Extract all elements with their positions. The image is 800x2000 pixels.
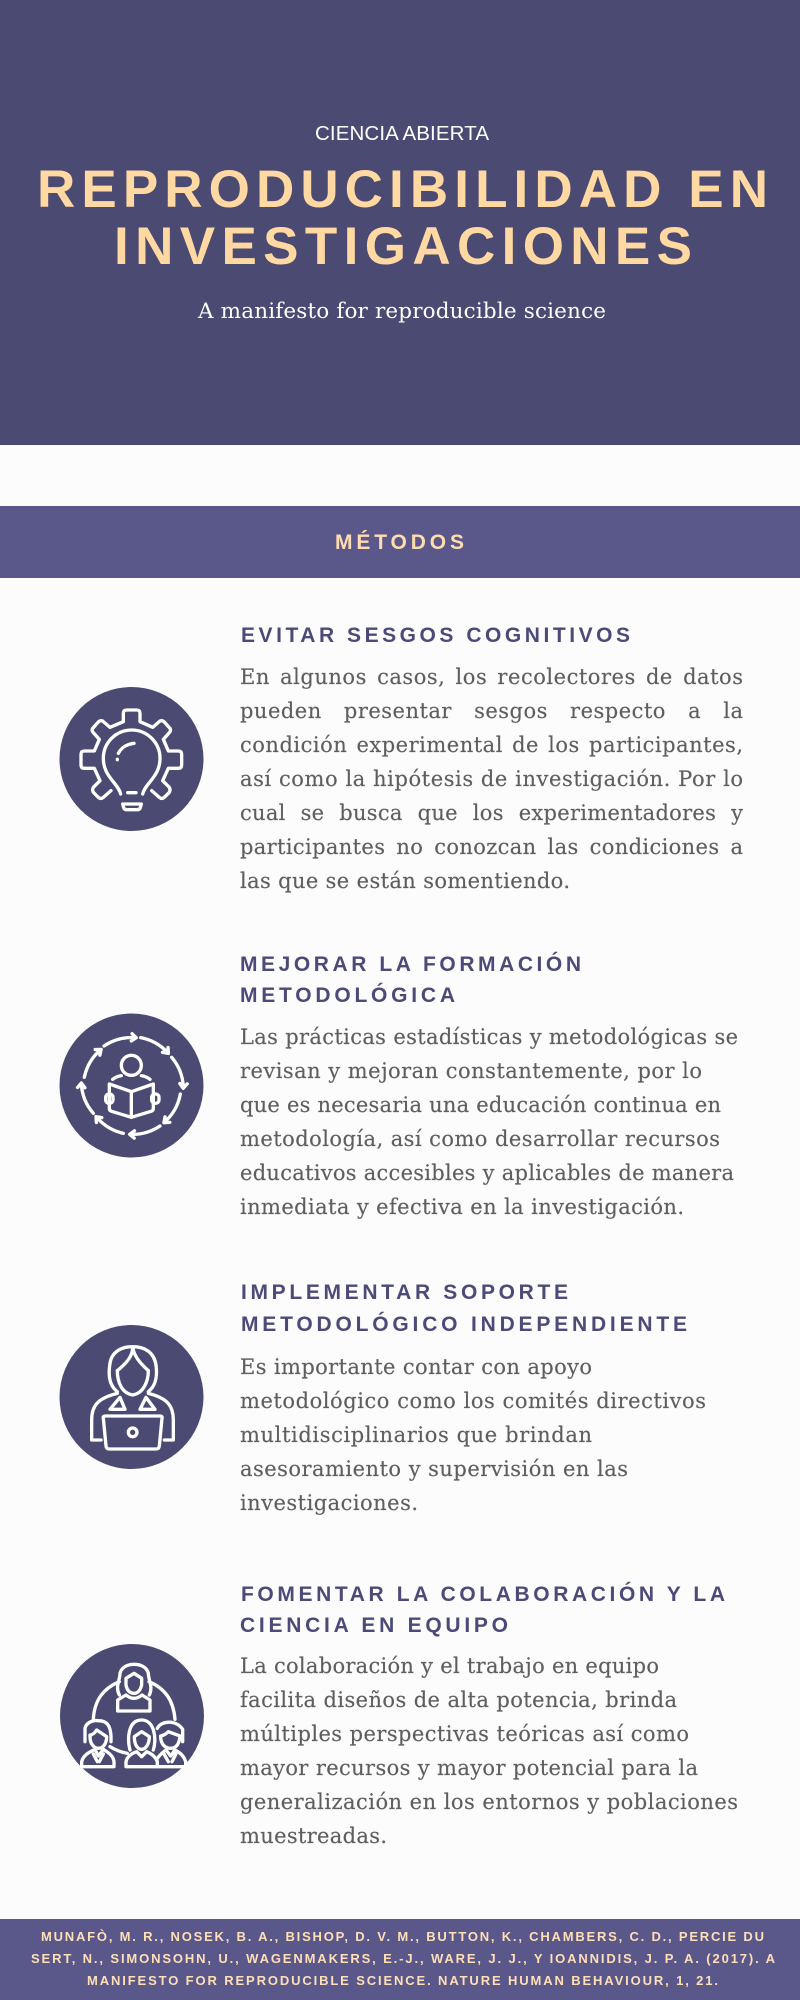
icon: reader in arrow cycle	[60, 1014, 204, 1158]
heading	[240, 1582, 725, 1637]
body text: investigaciones.	[240, 1491, 418, 1515]
icon: gear with light bulb	[60, 687, 204, 831]
body text: multidisciplinarios que brindan	[240, 1423, 592, 1447]
section band: métodos: MÉTODOS	[335, 531, 464, 554]
panel: mejorar la formación metodológica	[60, 952, 738, 1219]
body text: las que se están somentiendo.	[240, 869, 570, 893]
title: INVESTIGACIONES	[114, 217, 692, 276]
heading	[240, 952, 581, 1007]
body text	[240, 1654, 738, 1848]
body text: revisan y mejoran constantemente, por lo	[240, 1059, 702, 1083]
panel: evitar sesgos cognitivos	[60, 624, 743, 893]
body text: generalización en los entornos y poblaciones	[240, 1790, 738, 1814]
body text: Es importante contar con apoyo	[240, 1355, 592, 1379]
body text	[240, 665, 743, 893]
icon: team of four	[60, 1644, 204, 1788]
heading: METODOLÓGICA	[240, 983, 455, 1007]
section band: métodos	[0, 506, 800, 578]
body text: inmediata y efectiva en la investigación.	[240, 1195, 684, 1219]
footer citation: SERT, N., SIMONSOHN, U., WAGENMAKERS, E.-J., WARE, J. J., Y IOANNIDIS, J. P. A. (2017). A	[31, 1951, 776, 1966]
body text: asesoramiento y supervisión en las	[240, 1457, 628, 1481]
heading: EVITAR SESGOS COGNITIVOS	[241, 624, 630, 647]
title	[37, 160, 768, 276]
footer citation: MUNAFÒ, M. R., NOSEK, B. A., BISHOP, D. V. M., BUTTON, K., CHAMBERS, C. D., PERCIE DU	[41, 1929, 764, 1944]
heading: CIENCIA EN EQUIPO	[240, 1614, 508, 1637]
icon: woman with laptop	[60, 1325, 204, 1469]
body text	[240, 1025, 738, 1219]
heading	[241, 1281, 687, 1336]
subtitle: A manifesto for reproducible science	[197, 299, 606, 324]
body text: que es necesaria una educación continua en	[240, 1093, 721, 1117]
body text: cual se busca que los experimentadores y	[240, 801, 743, 825]
heading: MEJORAR LA FORMACIÓN	[240, 952, 581, 976]
panel: fomentar la colaboración	[60, 1582, 738, 1848]
body text: así como la hipótesis de investigación. Por lo	[240, 767, 743, 791]
body text: facilita diseños de alta potencia, brinda	[240, 1688, 677, 1712]
heading: METODOLÓGICO INDEPENDIENTE	[241, 1312, 687, 1336]
heading: FOMENTAR LA COLABORACIÓN Y LA	[241, 1582, 725, 1606]
body text: pueden presentar sesgos respecto a la	[240, 699, 743, 723]
heading: IMPLEMENTAR SOPORTE	[241, 1281, 568, 1304]
footer citation: MANIFESTO FOR REPRODUCIBLE SCIENCE. NATURE HUMAN BEHAVIOUR, 1, 21.	[87, 1973, 718, 1988]
footer citation	[0, 1919, 800, 2000]
body text: En algunos casos, los recolectores de datos	[240, 665, 743, 689]
title: REPRODUCIBILIDAD EN	[37, 160, 768, 219]
body text: participantes no conozcan las condiciones a	[240, 835, 743, 859]
body text: metodológico como los comités directivos	[240, 1389, 706, 1413]
eyebrow label: CIENCIA ABIERTA	[315, 122, 489, 145]
header panel	[0, 0, 800, 445]
panel: implementar soporte metodológico independiente	[60, 1281, 706, 1515]
body text: múltiples perspectivas teóricas así como	[240, 1722, 689, 1746]
body text: muestreadas.	[240, 1824, 387, 1848]
body text: La colaboración y el trabajo en equipo	[240, 1654, 659, 1678]
body text: metodología, así como desarrollar recursos	[240, 1127, 720, 1151]
body text: condición experimental de los participantes,	[240, 733, 743, 757]
body text: Las prácticas estadísticas y metodológicas se	[240, 1025, 738, 1049]
body text	[240, 1355, 706, 1515]
body text: mayor recursos y mayor potencial para la	[240, 1756, 698, 1780]
body text: educativos accesibles y aplicables de manera	[240, 1161, 734, 1185]
